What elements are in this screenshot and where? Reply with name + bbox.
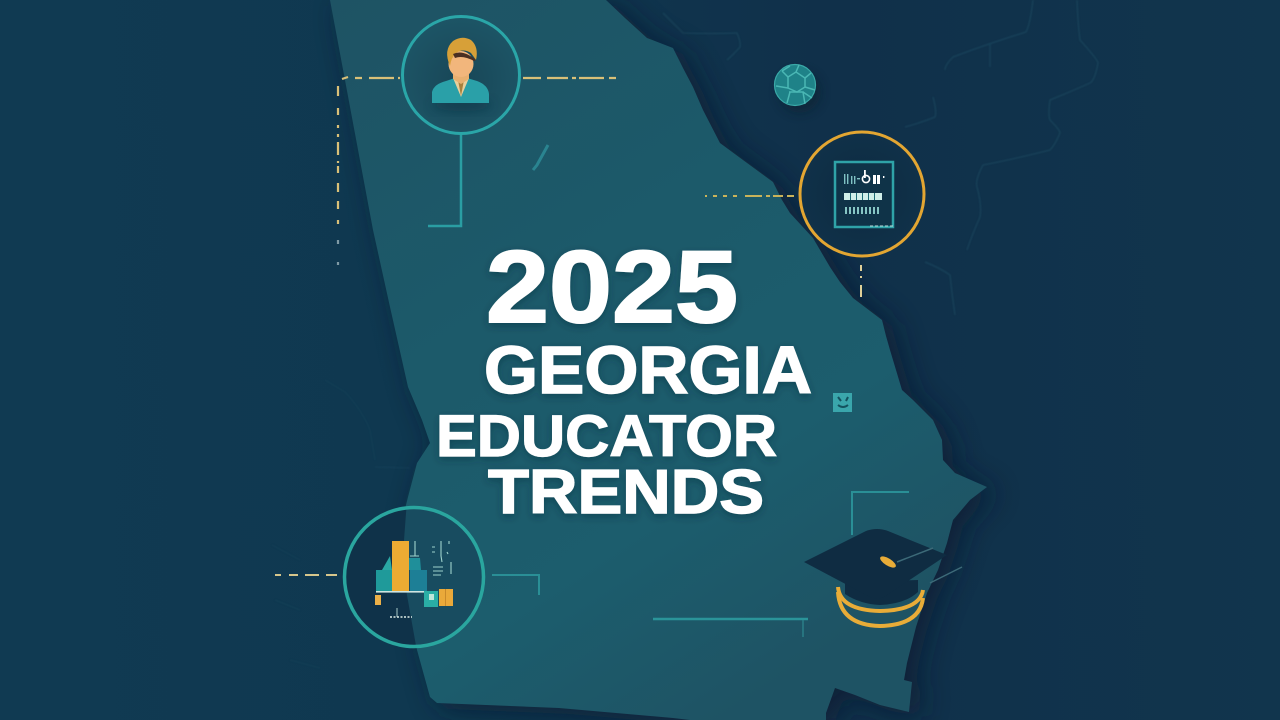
icon: globe [774,64,821,113]
circle interior [402,510,482,644]
connector: teal base line [653,618,808,620]
title line: EDUCATOR: EDUCATOR [436,404,777,469]
title line: GEORGIA: GEORGIA [484,333,812,408]
icon: data card [835,162,894,227]
connector: yellow dashed line [275,574,337,576]
gold circle ring [800,132,924,256]
title [436,230,812,527]
educator node [338,16,616,265]
connector: teal elbow [428,134,461,226]
map shadow [340,6,997,720]
connector: faint tick [802,620,804,637]
connector: teal elbow [492,575,539,595]
faint map tick mark [533,145,548,170]
circle ring [344,508,484,646]
connector: yellow dashed lines [338,77,616,265]
data card node [705,132,924,297]
circle ring [402,16,520,134]
connector: yellow dashed lines [705,196,861,297]
faint background contour lines [272,0,1098,668]
connector: teal elbow [852,492,909,535]
title line: TRENDS: TRENDS [488,458,764,527]
infographic canvas [275,0,1098,720]
icon: bar chart [375,541,453,617]
icon: graduation cap [804,529,962,626]
chart node [275,500,539,657]
small teal square icon [833,393,852,412]
icon: person [432,38,492,111]
title line: 2025: 2025 [486,230,738,344]
graduation cap node [653,492,962,637]
Georgia state map shape [330,0,987,720]
